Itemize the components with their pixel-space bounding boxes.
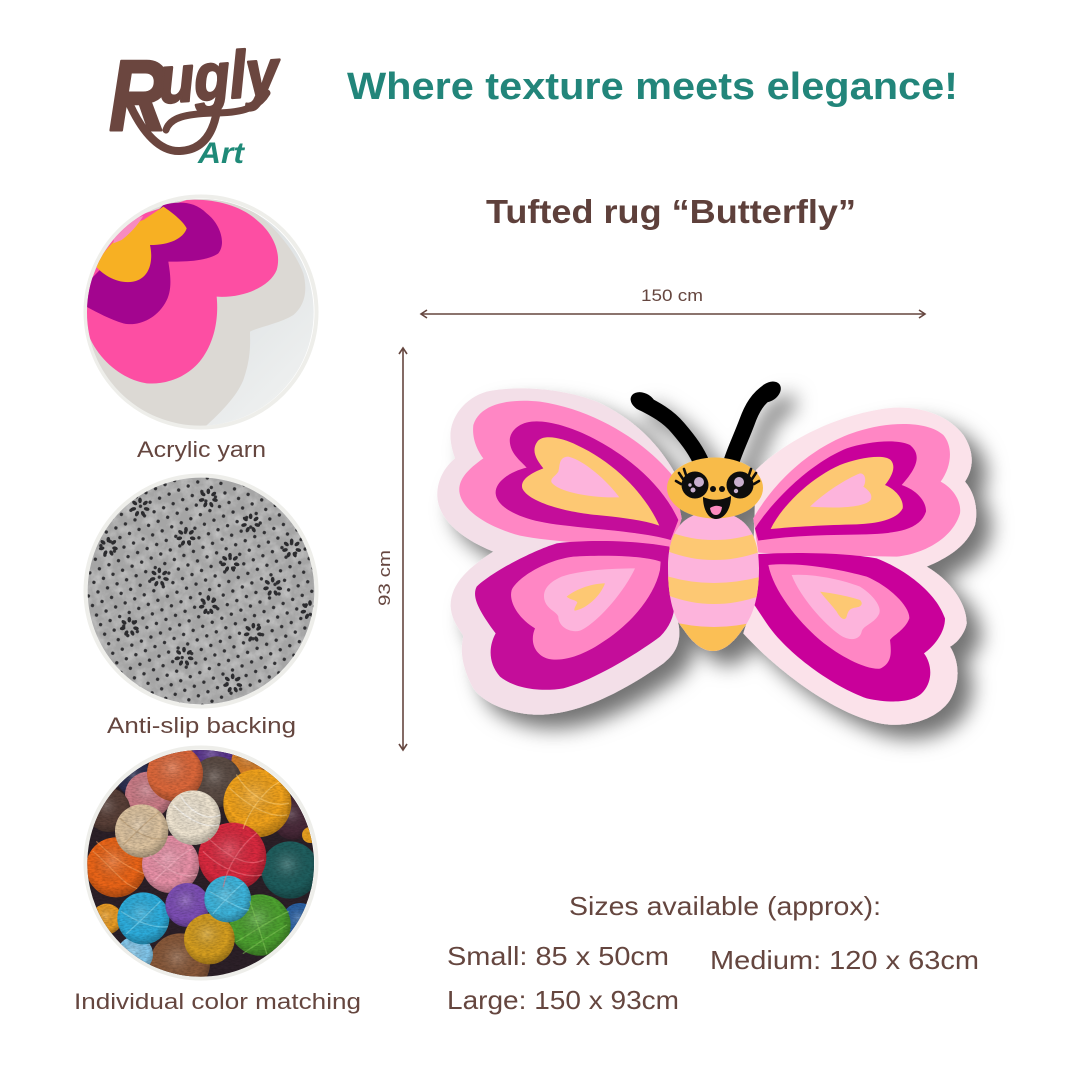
panel: acrylic yarn photo [80,190,320,430]
size: large: Large: 150 x 93cm [447,985,679,1015]
logo wordmark: Rugly: R [109,40,167,152]
title: Where texture meets elegance! [347,66,958,108]
sizes heading: Sizes available (approx): [569,891,881,921]
size: small: Small: 85 x 50cm [447,941,669,971]
butterfly rug illustration [437,377,976,725]
width label: 150 cm [641,286,703,305]
right antenna [731,377,785,463]
logo: Rugly Art [109,35,284,170]
face [676,469,759,519]
right wings [743,408,976,725]
panel: anti-slip backing photo [80,470,320,710]
left wings [437,388,682,715]
logo wordmark: Rugly [109,35,284,152]
height label: 93 cm [375,550,394,606]
width dimension arrow [421,310,925,318]
caption: acrylic yarn: Acrylic yarn [137,437,266,462]
height dimension arrow [399,348,407,750]
product heading: Tufted rug “Butterfly” [486,193,856,230]
caption: individual color matching: Individual color matching [74,989,361,1014]
left antenna [627,388,702,464]
head [667,458,763,518]
logo accent: Art: Art [197,137,246,170]
panel: yarn balls photo [84,746,318,980]
size: medium: Medium: 120 x 63cm [710,945,979,975]
striped body [660,505,770,660]
caption: anti-slip backing: Anti-slip backing [107,713,296,738]
logo wordmark: Rugly: ugly [156,35,284,117]
